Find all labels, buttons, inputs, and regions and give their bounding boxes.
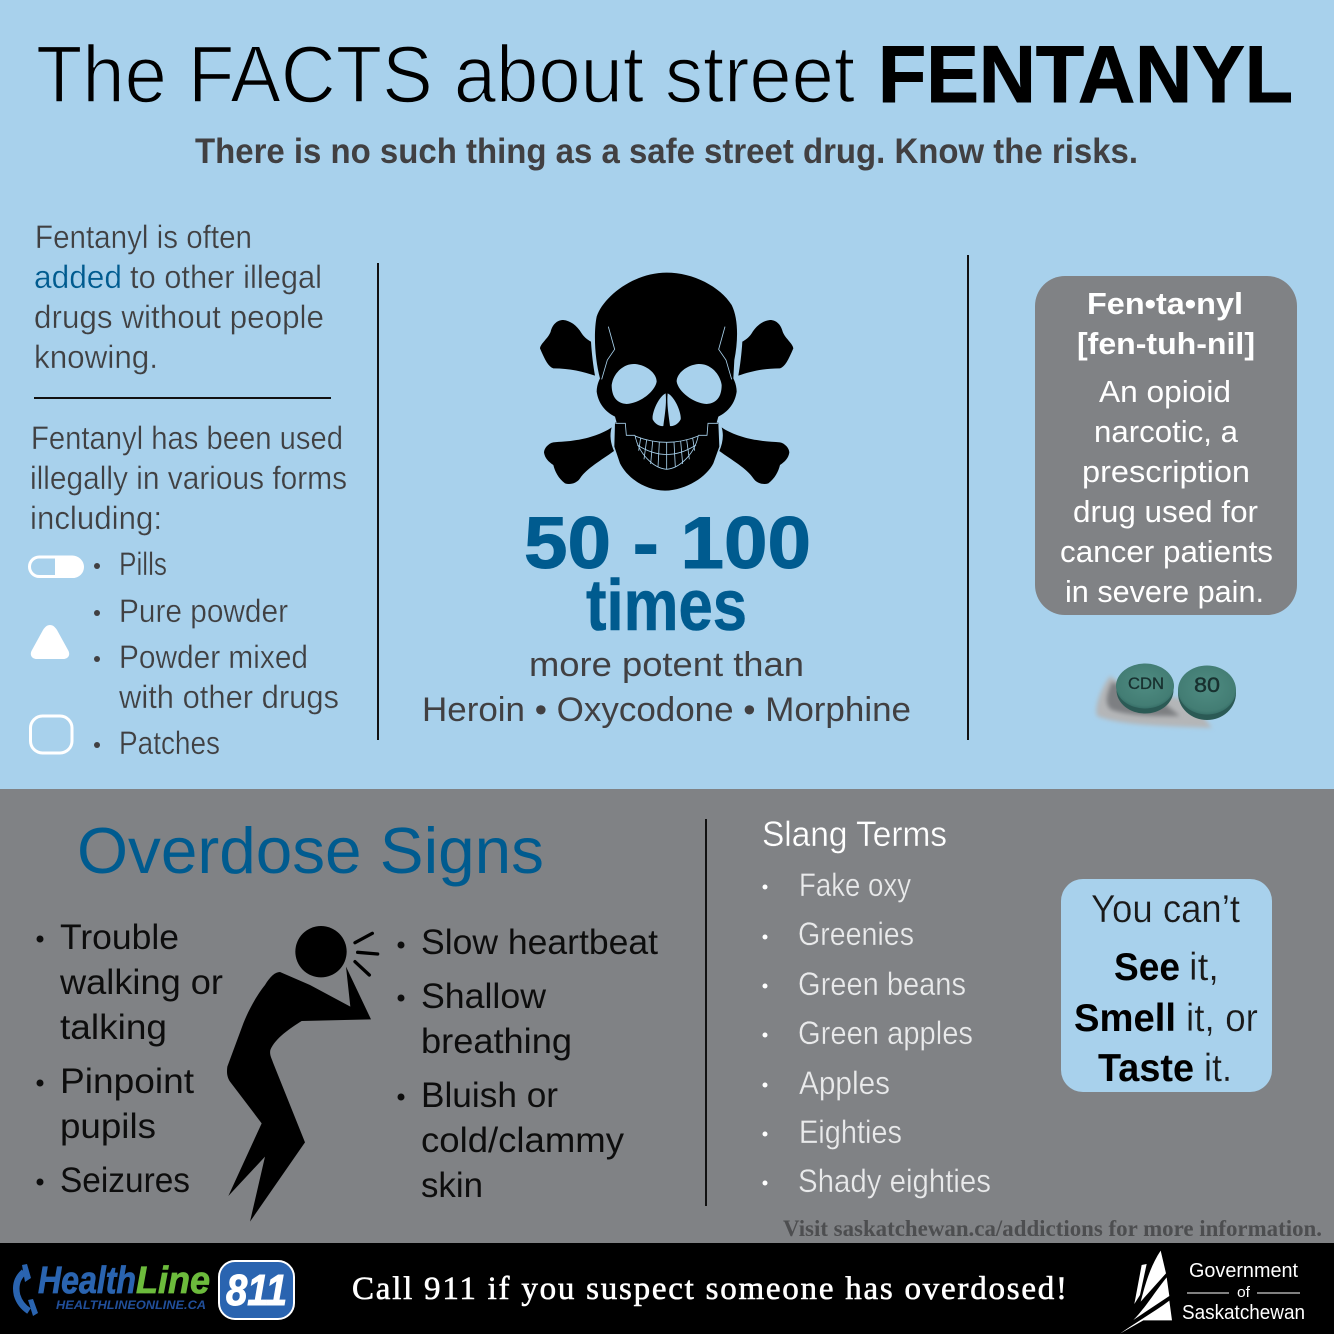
icon: collapsing person [227,926,378,1222]
callout: you can't see smell taste: Smell [1074,997,1176,1040]
logo: government of saskatchewan: Government [1189,1260,1298,1282]
list: slang terms: Eighties [799,1114,902,1150]
logo: government of saskatchewan [1120,1251,1305,1334]
text block: forms of fentanyl: including: [30,500,162,536]
text block: fentanyl is often added: added [34,259,122,295]
callout: you can't see smell taste: it. [1204,1047,1232,1090]
icon: green pills photo: CDN [1128,674,1164,693]
panel: definition: [fen-tuh-nil] [1077,326,1255,361]
list: overdose signs left: Seizures [60,1161,190,1200]
text: call 911: Call 911 if you suspect someone has overdosed! [352,1271,1067,1307]
panel: definition [1035,276,1297,615]
text block: fentanyl is often added: drugs without people [34,299,324,335]
big word: times: times [586,566,747,646]
panel: definition: narcotic, a [1094,414,1239,449]
list: overdose signs left: Trouble [60,918,179,957]
panel: definition: drug used for [1073,494,1258,529]
list: overdose signs right: Shallow [421,977,547,1016]
text: visit website: Visit saskatchewan.ca/addictions for more information. [783,1216,1322,1241]
callout: you can't see smell taste [1061,879,1272,1092]
list: slang terms: Apples [799,1065,890,1101]
text block: fentanyl is often added: knowing. [34,339,158,375]
title: The FACTS about street [36,30,855,120]
title [36,30,1293,120]
list: forms [94,546,339,761]
icon: skull and crossbones [540,273,793,491]
panel: definition: cancer patients [1060,534,1273,569]
callout: you can't see smell taste: You can’t [1091,888,1240,931]
list: overdose signs left [36,918,223,1200]
list: forms: Pills [119,546,167,582]
logo: healthline 811: 811 [226,1266,287,1315]
list: forms: Patches [119,725,220,761]
callout: you can't see smell taste: it, [1189,946,1219,989]
panel: definition: An opioid [1099,374,1231,409]
list: overdose signs right [398,923,658,1205]
subtitle: There is no such thing as a safe street drug. Know the risks. [195,132,1138,171]
text: comparison drugs: Heroin • Oxycodone • Morphine [422,691,911,729]
list: slang terms: Green beans [798,966,966,1002]
title: FENTANYL [878,30,1293,120]
text block: forms of fentanyl: illegally in various forms [30,460,347,496]
text block: forms of fentanyl: Fentanyl has been used [31,420,343,456]
logo: healthline 811: HEALTHLINEONLINE.CA [56,1300,206,1312]
list: overdose signs left: Pinpoint [60,1062,194,1101]
icon: patch [30,716,72,753]
heading: slang terms: Slang Terms [762,815,947,854]
logo: healthline 811: Health [38,1260,136,1302]
icon: powder triangle [31,625,69,659]
text block: fentanyl is often added: Fentanyl is often [35,219,252,255]
list: slang terms [762,867,991,1199]
text block: forms of fentanyl [30,420,347,536]
list: overdose signs left: pupils [60,1107,156,1146]
callout: you can't see smell taste: it, or [1186,997,1258,1040]
callout: you can't see smell taste: See [1114,946,1180,989]
icon: pill capsule [30,556,84,578]
panel: definition: prescription [1082,454,1250,489]
logo: government of saskatchewan: Saskatchewan [1182,1302,1305,1324]
list: forms: Pure powder [119,593,288,629]
text block: fentanyl is often added [34,219,324,375]
panel: definition: in severe pain. [1065,574,1264,609]
panel: definition: Fen•ta•nyl [1087,286,1243,321]
big number: 50 - 100: 50 - 100 [524,503,811,584]
list: overdose signs left: talking [60,1008,167,1047]
list: overdose signs right: breathing [421,1022,572,1061]
heading: overdose signs: Overdose Signs [77,814,544,887]
list: slang terms: Greenies [798,916,914,952]
logo: healthline 811 [16,1260,294,1319]
list: forms: with other drugs [118,679,339,715]
list: forms: Powder mixed [119,639,308,675]
icon: green pills photo: 80 [1194,674,1220,697]
list: slang terms: Green apples [798,1015,973,1051]
text: more potent than: more potent than [529,646,804,684]
logo: healthline 811: Line [136,1260,210,1302]
panel: footer [0,1243,1334,1334]
list: overdose signs right: Slow heartbeat [421,923,658,962]
logo: government of saskatchewan: of [1237,1284,1251,1301]
list: overdose signs right: skin [421,1166,483,1205]
list: overdose signs left: walking or [59,963,223,1002]
text block: fentanyl is often added: to other illegal [130,259,322,295]
list: slang terms: Fake oxy [799,867,911,903]
list: overdose signs right: Bluish or [421,1076,558,1115]
list: slang terms: Shady eighties [798,1163,991,1199]
callout: you can't see smell taste: Taste [1098,1047,1194,1090]
list: overdose signs right: cold/clammy [421,1121,625,1160]
icon: green pills photo [1096,664,1236,728]
